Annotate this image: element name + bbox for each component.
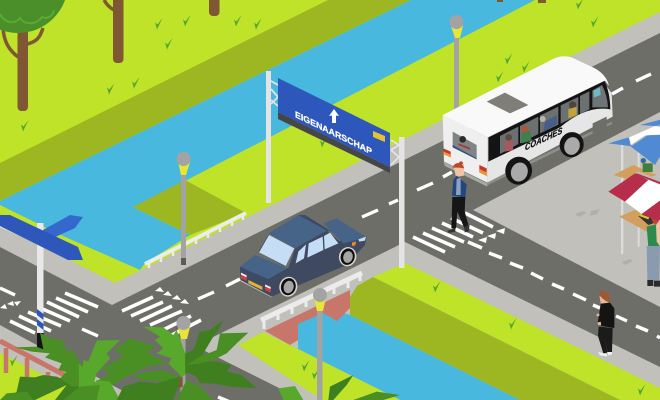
upper canal water — [0, 0, 535, 270]
bottom-left lime bank — [0, 353, 94, 400]
lamp post behind bus — [450, 15, 464, 115]
fence upper — [145, 213, 246, 268]
lamp post near sign — [176, 152, 190, 265]
right palm — [117, 320, 257, 400]
crosswalk right — [413, 213, 493, 252]
yield triangles — [0, 228, 505, 309]
bus passengers — [505, 101, 577, 152]
market stalls — [608, 119, 660, 287]
fence bridge — [261, 273, 362, 329]
bus: COACHES — [525, 125, 563, 154]
fence left — [0, 226, 40, 244]
lamp post foreground bridge — [313, 288, 327, 400]
man walking — [597, 290, 614, 357]
bridge brick piers — [265, 290, 350, 345]
back stall — [608, 119, 660, 254]
upper canal embankment — [0, 0, 411, 201]
palm plants — [0, 320, 400, 400]
small embankment diamond — [133, 180, 246, 235]
overhead sign: EIGENAARSCHAP — [295, 109, 372, 157]
overhead sign — [266, 71, 404, 268]
lamp post behind palms — [176, 316, 190, 400]
left lime strip — [60, 237, 140, 283]
pavement stains — [575, 209, 633, 265]
trees — [0, 0, 546, 111]
lower canal embankment and water — [238, 263, 660, 400]
crosswalk left — [10, 293, 98, 333]
front stall — [608, 171, 660, 232]
bus — [443, 56, 613, 188]
left palm — [0, 333, 167, 400]
pink fence — [0, 341, 70, 400]
signpost with direction arms — [0, 215, 83, 352]
crosswalk centre — [122, 297, 201, 335]
woman on crossing — [447, 161, 470, 233]
vendor — [647, 218, 660, 287]
car — [240, 215, 367, 299]
lower right palm — [278, 375, 400, 400]
